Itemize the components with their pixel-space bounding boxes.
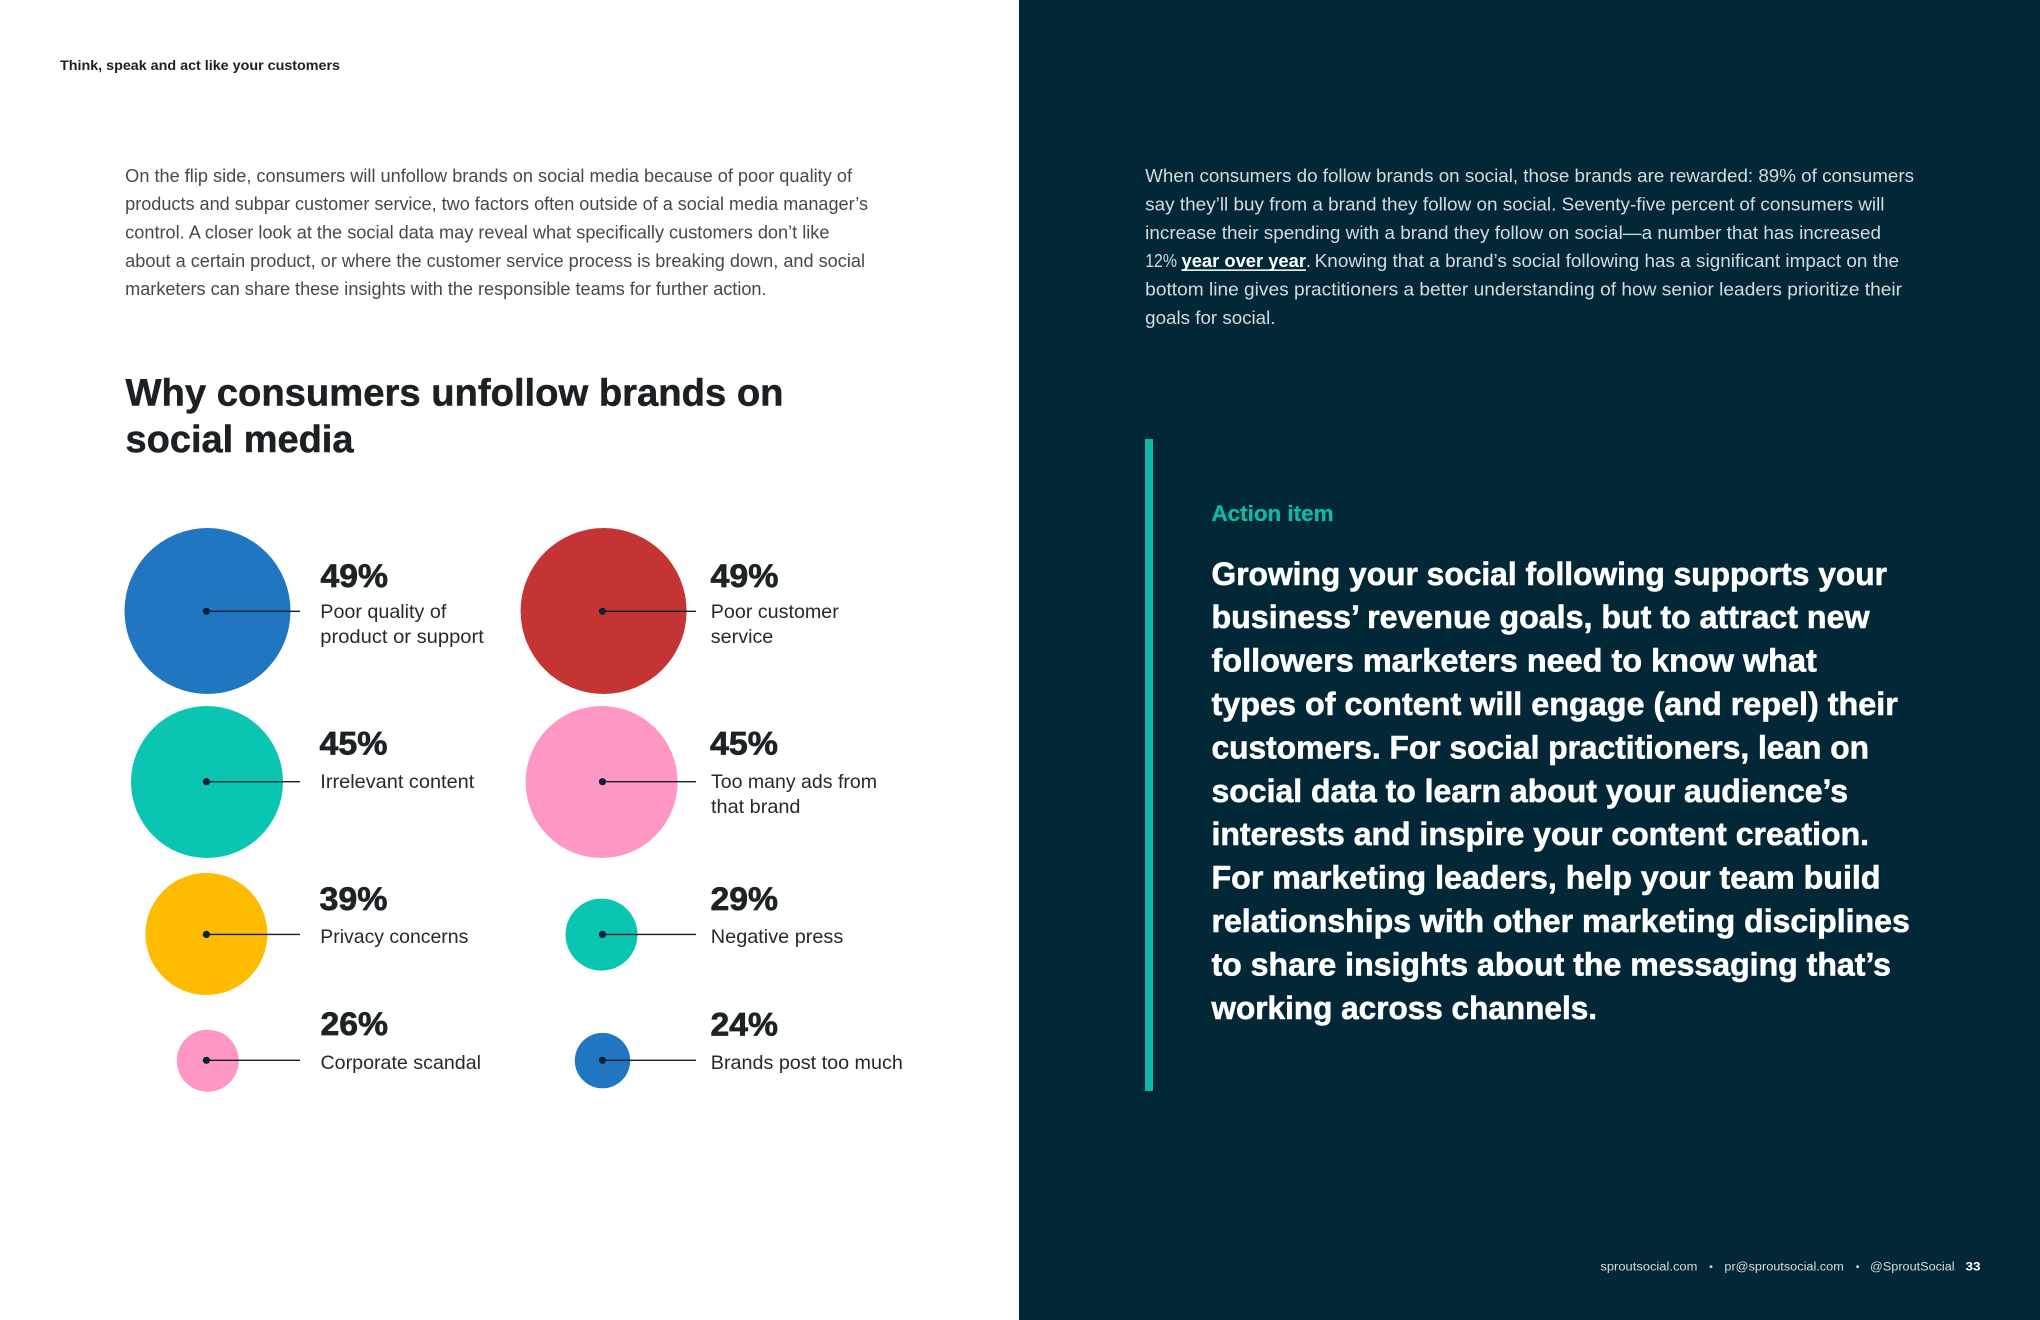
- action item text: business’ revenue goals, but to attract new: [1212, 599, 1870, 635]
- item: 45% too many ads: 45%: [710, 726, 778, 762]
- item: 49% poor quality: 49%: [320, 558, 388, 594]
- item: 45% too many ads: that brand: [711, 796, 800, 818]
- right paragraph: year over year: [1182, 251, 1306, 271]
- action item text: Growing your social following supports your: [1212, 556, 1887, 592]
- right paragraph: increase their spending with a brand they follow on social—a number that has increased: [1145, 223, 1881, 243]
- footer contact line: 33: [1966, 1259, 1981, 1273]
- intro paragraph: products and subpar customer service, two factors often outside of a social media manager’s: [125, 194, 868, 214]
- item: 49% poor customer service: Poor customer: [711, 601, 839, 623]
- chart heading: Why consumers unfollow brands on: [126, 372, 784, 414]
- item: 24% brands post too much: Brands post too much: [711, 1052, 903, 1074]
- panel: right dark page: [1019, 0, 2040, 1320]
- item: 26% corporate scandal: 26%: [320, 1006, 388, 1042]
- item: 49% poor quality: product or support: [320, 626, 484, 648]
- intro paragraph: control. A closer look at the social data may reveal what specifically customers don’t like: [125, 223, 830, 243]
- running header: Think, speak and act like your customers: [60, 57, 340, 73]
- intro paragraph: about a certain product, or where the customer service process is breaking down, and social: [125, 251, 865, 271]
- action item text: followers marketers need to know what: [1212, 643, 1817, 679]
- item: 39% privacy concerns: [145, 873, 469, 995]
- item: 45% irrelevant content: Irrelevant content: [320, 771, 475, 793]
- right paragraph: [1145, 166, 1914, 328]
- footer contact line: @SproutSocial: [1870, 1261, 1955, 1273]
- footer contact line: [1600, 1259, 1981, 1273]
- item: 45% too many ads: Too many ads from: [711, 771, 877, 793]
- right paragraph: .: [1306, 251, 1311, 271]
- item: 39% privacy concerns: 39%: [320, 881, 388, 917]
- footer contact line: sproutsocial.com: [1600, 1261, 1697, 1273]
- action item text: relationships with other marketing disciplines: [1212, 903, 1910, 939]
- footer contact line: pr@sproutsocial.com: [1724, 1261, 1844, 1273]
- intro paragraph: [125, 166, 868, 299]
- item: 49% poor quality: [124, 528, 484, 694]
- item: 26% corporate scandal: Corporate scandal: [320, 1052, 481, 1074]
- item: 24% brands post too much: 24%: [710, 1006, 778, 1042]
- action item text: interests and inspire your content creation.: [1212, 816, 1869, 852]
- right paragraph: goals for social.: [1145, 308, 1276, 328]
- action item label: Action item: [1212, 501, 1334, 526]
- item: 39% privacy concerns: Privacy concerns: [320, 926, 469, 948]
- action item text: [1211, 556, 1910, 1026]
- action item text: working across channels.: [1211, 990, 1597, 1026]
- action item text: to share insights about the messaging that’s: [1212, 946, 1891, 982]
- action item text: social data to learn about your audience’s: [1212, 773, 1848, 809]
- item: 29% negative press: Negative press: [711, 926, 844, 948]
- action item text: types of content will engage (and repel) their: [1212, 686, 1898, 722]
- intro paragraph: marketers can share these insights with the responsible teams for further action.: [125, 279, 766, 299]
- right paragraph: 12%: [1145, 251, 1177, 271]
- item: 49% poor customer service: 49%: [710, 558, 779, 594]
- item: 45% irrelevant content: [131, 706, 475, 858]
- intro paragraph: On the flip side, consumers will unfollow brands on social media because of poor quality of: [125, 166, 853, 186]
- chart heading: social media: [126, 419, 354, 461]
- item: 26% corporate scandal: [177, 1006, 481, 1092]
- bubble chart: reasons for unfollowing: [124, 528, 903, 1092]
- action item text: For marketing leaders, help your team build: [1212, 860, 1880, 896]
- right paragraph: bottom line gives practitioners a better understanding of how senior leaders prioritize their: [1145, 279, 1902, 299]
- panel: left white page: [0, 0, 1019, 1320]
- right paragraph: say they’ll buy from a brand they follow on social. Seventy-five percent of consumers will: [1145, 194, 1884, 214]
- right paragraph: Knowing that a brand’s social following has a significant impact on the: [1315, 251, 1899, 271]
- item: 24% brands post too much: [575, 1006, 903, 1088]
- item: 45% too many ads: [526, 706, 877, 858]
- right paragraph: When consumers do follow brands on social, those brands are rewarded: 89% of consumers: [1145, 166, 1914, 186]
- item: 49% poor customer service: [521, 528, 839, 694]
- item: 29% negative press: 29%: [710, 881, 778, 917]
- item: 49% poor customer service: service: [711, 626, 773, 648]
- action item text: customers. For social practitioners, lean on: [1212, 729, 1869, 765]
- item: 45% irrelevant content: 45%: [320, 726, 388, 762]
- item: 29% negative press: [566, 881, 844, 971]
- chart heading: [126, 372, 784, 461]
- item: 49% poor quality: Poor quality of: [320, 601, 447, 623]
- action item accent bar: [1145, 439, 1153, 1091]
